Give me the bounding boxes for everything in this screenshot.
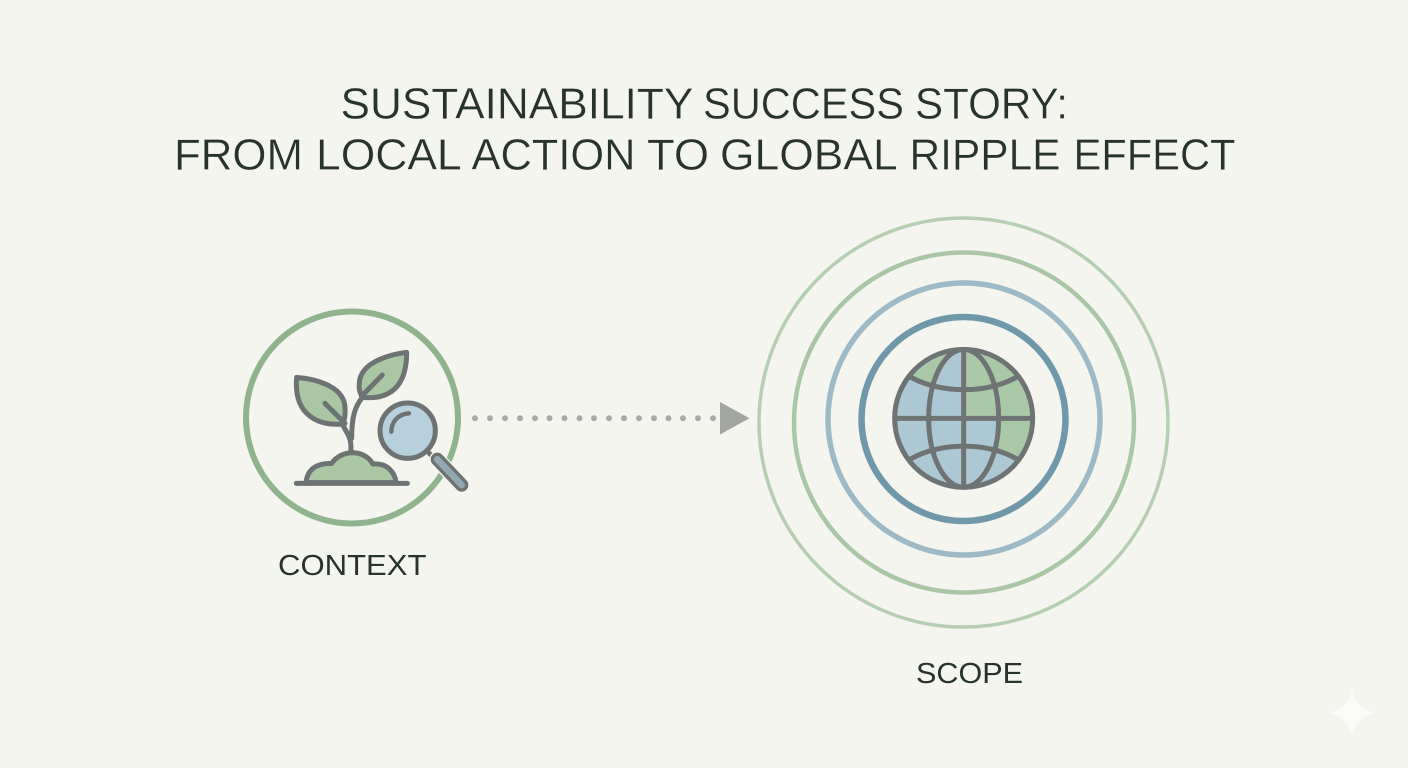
globe grid bbox=[895, 349, 1033, 487]
icon: sparkle watermark bbox=[1329, 690, 1375, 736]
icon: magnifier handle bbox=[429, 453, 462, 485]
panel: context bbox=[246, 312, 462, 582]
arrow dots bbox=[472, 415, 716, 421]
infographic canvas bbox=[178, 88, 1373, 734]
title: TO bbox=[647, 132, 709, 180]
ripple ring 3 bbox=[794, 252, 1134, 592]
icon: soil mound bbox=[306, 453, 396, 483]
title: LOCAL bbox=[316, 132, 460, 180]
icon: seedling with magnifying glass bbox=[296, 352, 462, 485]
icon: lens highlight bbox=[391, 413, 409, 432]
icon: right leaf bbox=[359, 352, 407, 398]
ripple ring 2 bbox=[828, 283, 1100, 555]
icon: magnifier lens bbox=[380, 403, 435, 458]
title bbox=[174, 81, 1236, 180]
arrowhead bbox=[720, 402, 750, 434]
ripple ring 1 bbox=[862, 317, 1066, 521]
globe ocean bbox=[895, 349, 1033, 487]
context ring bbox=[246, 312, 458, 524]
title: SUCCESS bbox=[703, 81, 904, 129]
scope label: SCOPE bbox=[916, 658, 1023, 690]
title: ACTION bbox=[472, 132, 636, 180]
context label: CONTEXT bbox=[278, 550, 427, 582]
title: SUSTAINABILITY bbox=[340, 81, 693, 129]
title: FROM bbox=[174, 132, 303, 180]
title: GLOBAL bbox=[720, 132, 896, 180]
icon: ground line bbox=[296, 476, 407, 491]
arrow: dotted connector bbox=[472, 402, 750, 434]
title: EFFECT bbox=[1074, 132, 1236, 180]
title: RIPPLE bbox=[910, 132, 1060, 180]
title: STORY: bbox=[915, 81, 1068, 129]
ripple ring 4 bbox=[759, 218, 1168, 627]
icon: leaf veins and stem bbox=[325, 375, 382, 452]
icon: left leaf bbox=[296, 377, 345, 424]
panel: scope bbox=[759, 218, 1168, 690]
globe outline bbox=[895, 349, 1033, 487]
icon: globe bbox=[895, 347, 1033, 487]
globe land bbox=[913, 352, 1030, 457]
